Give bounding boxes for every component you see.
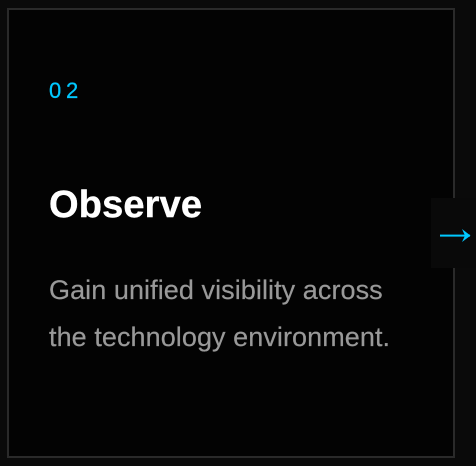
description text: the technology environment. [49, 322, 390, 352]
step number: 02 [49, 78, 83, 103]
connector box with arrow [431, 198, 476, 268]
description text: Gain unified visibility across [49, 275, 383, 305]
icon: right arrow [440, 229, 470, 242]
description text [49, 275, 390, 352]
heading: Observe [49, 184, 202, 226]
